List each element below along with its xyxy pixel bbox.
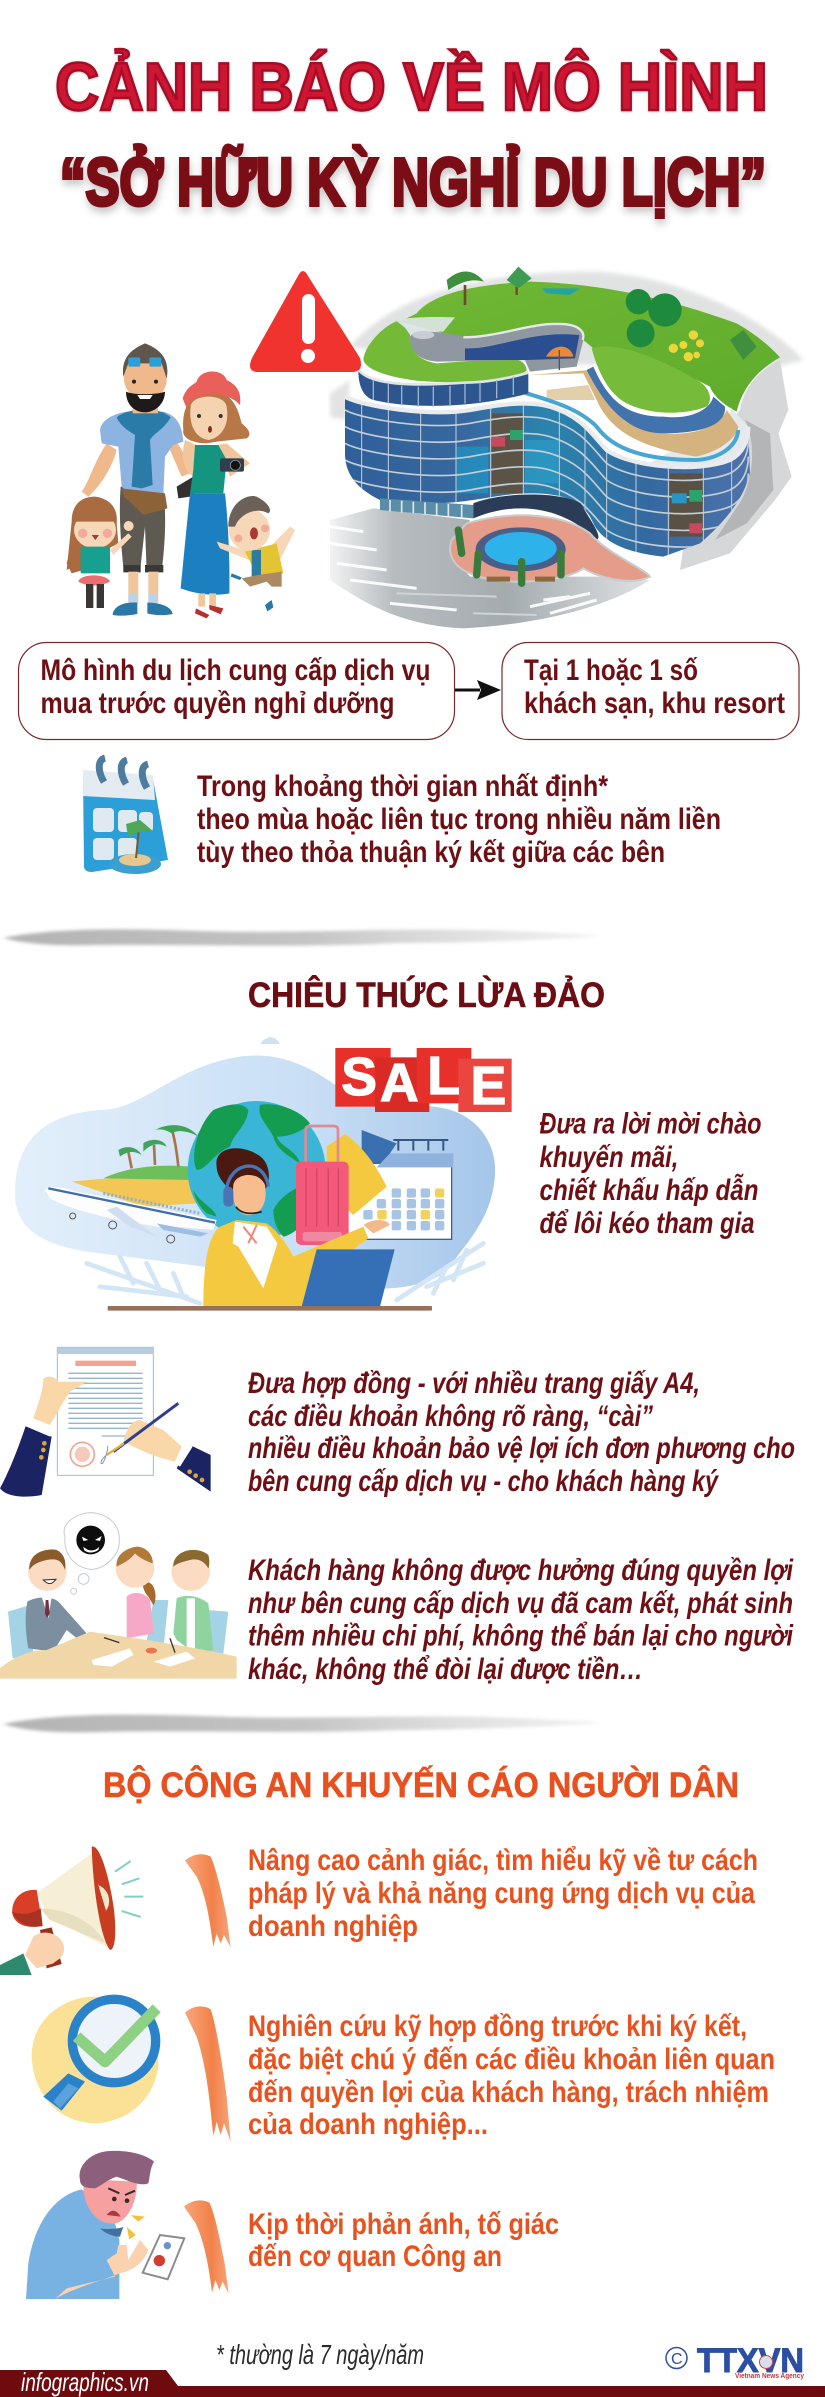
text: customer rights: khác, không thể đòi lại được tiền… (248, 1653, 643, 1686)
text: contract clauses (248, 1367, 795, 1498)
calendar and tickets (337, 1130, 453, 1239)
text: time period: theo mùa hoặc liên tục trong nhiều năm liền (197, 803, 721, 836)
green roof (363, 282, 780, 413)
suitcase (296, 1126, 349, 1245)
thought cloud (64, 1513, 119, 1594)
logo: TTXVN: C (671, 2351, 683, 2368)
illustration: hotel building (330, 267, 803, 628)
boy (217, 496, 295, 611)
island and palms (72, 1125, 198, 1207)
father (82, 343, 190, 616)
text: promotional offers: để lôi kéo tham gia (540, 1207, 754, 1240)
table (0, 1632, 237, 1679)
text: time period: Trong khoảng thời gian nhất định* (197, 770, 608, 803)
courtyard ribbon (395, 317, 584, 372)
arrow (455, 680, 501, 700)
customer service agent (203, 1148, 390, 1307)
text: contract clauses: các điều khoản không rõ ràng, “cài” (248, 1400, 653, 1433)
footnote: * thường là 7 ngày/năm (216, 2339, 424, 2370)
title (55, 48, 768, 220)
brush mark 3 (184, 2200, 229, 2293)
icon: magnifier with check mark (32, 1997, 158, 2123)
text: raise vigilance (248, 1844, 758, 1943)
upper tier glass (358, 369, 528, 407)
man in suit (26, 1550, 98, 1652)
icon: angry man on phone (26, 2151, 184, 2299)
icons column: recommendations (0, 1846, 231, 2299)
illustration: meeting with hidden villain (0, 1513, 237, 1679)
icon: megaphone (0, 1846, 143, 1975)
text: promotional offers: chiết khấu hấp dẫn (540, 1173, 758, 1207)
girl (67, 497, 134, 608)
sale sign: E (471, 1057, 506, 1116)
water (330, 508, 650, 628)
sale sign: S (341, 1048, 377, 1107)
logo: TTXVN: Vietnam News Agency (735, 2371, 805, 2380)
text: time period: tùy theo thỏa thuận ký kết giữa các bên (197, 836, 665, 869)
box: location (502, 642, 799, 740)
icon: warning triangle (250, 271, 361, 372)
icon: calendar with palm island (83, 758, 168, 874)
illustration: family (67, 343, 295, 618)
box: location: khách sạn, khu resort (524, 687, 785, 720)
box: location: Tại 1 hoặc 1 số (524, 654, 698, 687)
heading: police recommendations: BỘ CÔNG AN KHUYẾN CÁO NGƯỜI DÂN (103, 1765, 739, 1805)
man in green (171, 1550, 213, 1655)
chairs (8, 1600, 228, 1658)
box: model description (18, 642, 454, 740)
sale sign (335, 1047, 512, 1116)
grey halo around building (330, 272, 803, 570)
box: model description: Mô hình du lịch cung cấp dịch vụ (40, 654, 430, 687)
mother (177, 371, 250, 618)
footer bar: infographics.vn (21, 2367, 149, 2397)
title: CẢNH BÁO VỀ MÔ HÌNH (55, 48, 768, 125)
brush mark 1 (185, 1854, 231, 1947)
text: study the contract: của doanh nghiệp... (248, 2108, 488, 2141)
logo: TTXVN: TTXVN (697, 2342, 804, 2380)
box: model description: mua trước quyền nghỉ dưỡng (40, 687, 394, 720)
desk (108, 1306, 432, 1311)
hotel facade (345, 393, 751, 564)
ground floor (380, 495, 598, 540)
text: promotional offers: Đưa ra lời mời chào (540, 1108, 762, 1140)
sale sign: L (427, 1047, 460, 1106)
plane (45, 1187, 217, 1243)
blue blob (15, 1037, 495, 1303)
text: customer rights (248, 1554, 794, 1686)
text: report promptly (248, 2208, 559, 2273)
terrace (522, 347, 738, 460)
heading: scam tactics: CHIÊU THỨC LỪA ĐẢO (248, 975, 605, 1015)
illustration: sale call centre (15, 1037, 512, 1311)
pool deck (450, 515, 650, 583)
text: raise vigilance: doanh nghiệp (248, 1910, 418, 1943)
globe (188, 1101, 326, 1239)
credit card (327, 1134, 387, 1215)
text: promotional offers (540, 1108, 762, 1240)
text: report promptly: Kịp thời phản ánh, tố giác (248, 2208, 559, 2241)
laptop (280, 1249, 395, 1307)
text: report promptly: đến cơ quan Công an (248, 2240, 502, 2273)
brush mark 2 (185, 2006, 231, 2142)
illustration: signing contract (0, 1347, 211, 1497)
text: contract clauses: Đưa hợp đồng - với nhiều trang giấy A4, (248, 1367, 700, 1400)
trees and flowers (447, 267, 757, 361)
text: time period (197, 770, 721, 869)
footer bar (0, 2367, 825, 2397)
woman (116, 1547, 156, 1638)
text: study the contract (248, 2010, 775, 2141)
text: promotional offers: khuyến mãi, (540, 1141, 678, 1174)
sale sign: A (380, 1054, 419, 1113)
